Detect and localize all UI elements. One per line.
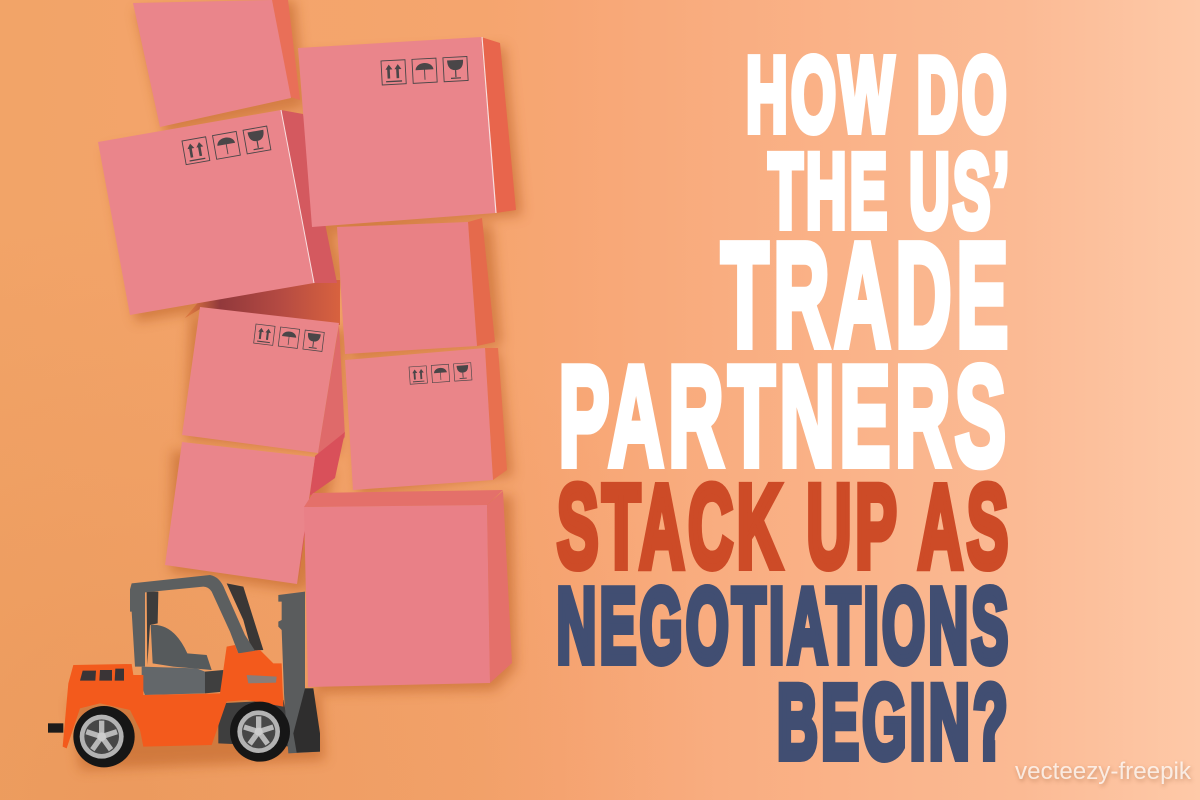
forklift rear wheel [73, 706, 135, 767]
forklift headlight [247, 675, 277, 683]
icons: handling symbols [409, 363, 472, 384]
title line: begin: BEGIN? [777, 664, 1011, 781]
forklift lower chassis [218, 700, 293, 747]
forklift hitch [48, 723, 63, 733]
box shadows [70, 0, 522, 770]
box: left with icons [98, 110, 337, 315]
forklift overhead guard [130, 575, 257, 667]
forklift seat base [142, 667, 205, 695]
forklift mast lower shade [293, 688, 320, 753]
box: top left [133, 0, 300, 127]
box: lower middle right with icons [345, 348, 507, 490]
box: large bottom [304, 490, 512, 687]
forklift [48, 575, 320, 767]
box: lower middle left with icons [182, 307, 345, 453]
forklift front wheel [230, 702, 290, 762]
title [556, 36, 1013, 781]
image credit: vecteezy-freepik [1015, 758, 1192, 785]
dark gap under left box [185, 280, 340, 325]
forklift inner post [147, 592, 158, 665]
stack of boxes [98, 0, 516, 687]
forklift engine block [205, 670, 223, 693]
icons: handling symbols [254, 324, 324, 351]
forklift hydraulic arm [227, 583, 263, 651]
forklift rear vents [80, 669, 124, 681]
forklift mast [278, 592, 320, 753]
box: top right with icons [298, 37, 516, 227]
forklift orange body [63, 645, 283, 748]
icons: handling symbols [381, 56, 468, 85]
forklift seat back [151, 625, 212, 670]
box: tilted above forklift [165, 432, 345, 584]
icons: handling symbols [182, 126, 271, 165]
box: middle right upright [337, 218, 495, 354]
